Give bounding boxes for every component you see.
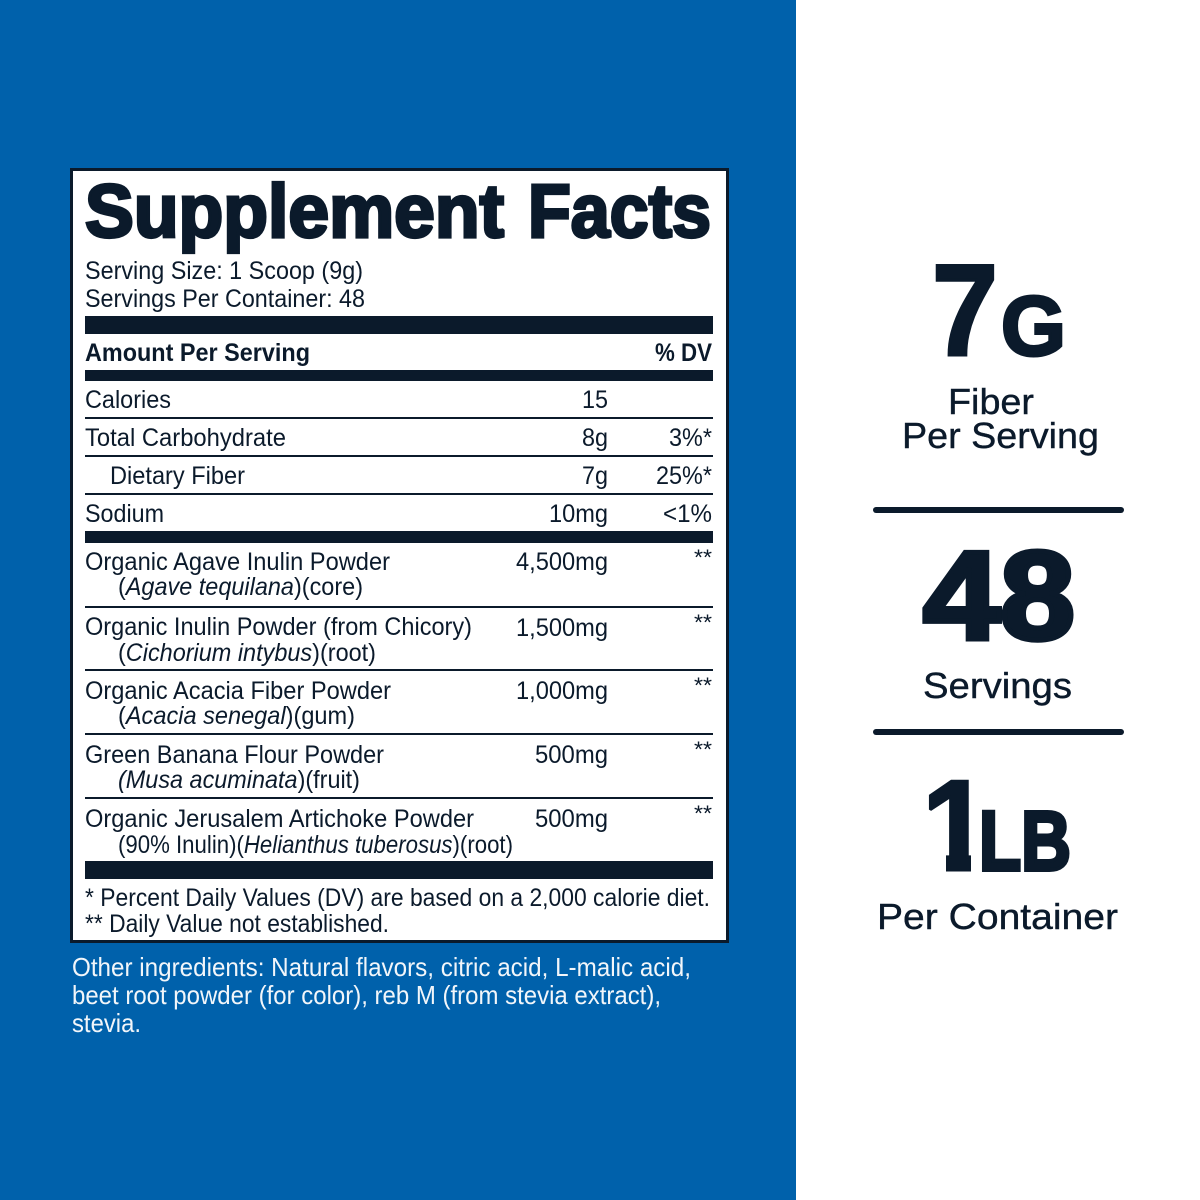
other ingredients text: stevia. (72, 1008, 141, 1038)
row: chicory inulin (85, 610, 712, 667)
stat: 7g fiber per serving (902, 237, 1099, 456)
row: dietary fiber: 7g (582, 462, 608, 490)
stat: 48 servings: Servings (923, 665, 1072, 706)
row: green banana (85, 737, 712, 794)
stat: 1lb per container: Per Container (877, 896, 1118, 937)
row: dietary fiber: 25%* (656, 462, 712, 490)
table header: % DV (655, 339, 712, 367)
serving info (85, 257, 365, 313)
serving info: Servings Per Container: 48 (85, 285, 365, 313)
footnotes: * Percent Daily Values (DV) are based on a 2,000 calorie diet. (85, 884, 710, 912)
stat: 7g fiber per serving: Fiber (948, 381, 1034, 422)
row: agave inulin: 4,500mg (516, 548, 608, 576)
stat: 1lb per container: LB (979, 794, 1071, 888)
row: jerusalem artichoke (85, 801, 712, 859)
row: chicory inulin: (Cichorium intybus)(root) (118, 639, 376, 667)
table header (85, 339, 712, 367)
heading: Supplement Facts: Facts (528, 169, 711, 253)
row: acacia fiber: Organic Acacia Fiber Powder (85, 677, 391, 705)
stat: 7g fiber per serving: Per Serving (902, 415, 1099, 456)
stat: 48 servings (923, 525, 1075, 706)
thick divider (85, 370, 713, 381)
heading: Supplement Facts: Supplement (85, 169, 504, 253)
panel: blue background (0, 0, 796, 1200)
panel: supplement facts label (72, 169, 728, 942)
other ingredients text: Other ingredients: Natural flavors, citric acid, L-malic acid, (72, 952, 691, 982)
row: green banana: Green Banana Flour Powder (85, 741, 384, 769)
footnotes: ** Daily Value not established. (85, 910, 389, 938)
divider (873, 729, 1124, 735)
row: sodium (85, 500, 712, 528)
stat: 1lb per container (880, 780, 1118, 930)
other ingredients text (72, 952, 691, 1038)
thick divider (85, 531, 713, 543)
divider (873, 507, 1124, 513)
row: chicory inulin: ** (694, 610, 712, 635)
row: total carbohydrate: Total Carbohydrate (85, 424, 286, 452)
row: agave inulin: ** (694, 545, 712, 570)
row: agave inulin: Organic Agave Inulin Powder (85, 548, 390, 576)
stat: 48 servings: 8 (1000, 525, 1075, 666)
row: calories (85, 386, 608, 414)
row: green banana: ** (694, 737, 712, 762)
row: jerusalem artichoke: 500mg (535, 805, 608, 833)
footnotes (85, 884, 710, 938)
other ingredients text: beet root powder (for color), reb M (from stevia extract), (72, 980, 661, 1010)
row: jerusalem artichoke: Organic Jerusalem Artichoke Powder (85, 805, 474, 833)
stat: 7g fiber per serving: 7 (932, 237, 998, 383)
row: sodium: Sodium (85, 500, 164, 528)
stat: 7g fiber per serving: G (1001, 279, 1066, 373)
row: acacia fiber: (Acacia senegal)(gum) (118, 702, 355, 730)
row: chicory inulin: Organic Inulin Powder (from Chicory) (85, 613, 472, 641)
row: acacia fiber: 1,000mg (516, 677, 608, 705)
row: jerusalem artichoke: (90% Inulin)(Helianthus tuberosus)(root) (118, 831, 513, 859)
thick divider (85, 861, 713, 879)
stat: 1lb per container: 1 (922, 754, 990, 898)
stat: 48 servings: 4 (923, 525, 1000, 666)
row: chicory inulin: 1,500mg (516, 614, 608, 642)
row: acacia fiber (85, 673, 712, 730)
table header: Amount Per Serving (85, 339, 310, 367)
row: dietary fiber: Dietary Fiber (110, 462, 245, 490)
thick divider (85, 316, 713, 334)
row: green banana: 500mg (535, 741, 608, 769)
row: total carbohydrate: 3%* (669, 424, 712, 452)
row: total carbohydrate: 8g (582, 424, 608, 452)
row: green banana: (Musa acuminata)(fruit) (118, 766, 360, 794)
row: sodium: 10mg (549, 500, 608, 528)
row: total carbohydrate (85, 424, 712, 452)
serving info: Serving Size: 1 Scoop (9g) (85, 257, 363, 285)
row: sodium: <1% (663, 500, 712, 528)
row: jerusalem artichoke: ** (694, 801, 712, 826)
row: agave inulin: (Agave tequilana)(core) (118, 573, 363, 601)
row: acacia fiber: ** (694, 673, 712, 698)
row: dietary fiber (110, 462, 712, 490)
row: calories: 15 (582, 386, 608, 414)
row: agave inulin (85, 545, 712, 601)
row: calories: Calories (85, 386, 171, 414)
